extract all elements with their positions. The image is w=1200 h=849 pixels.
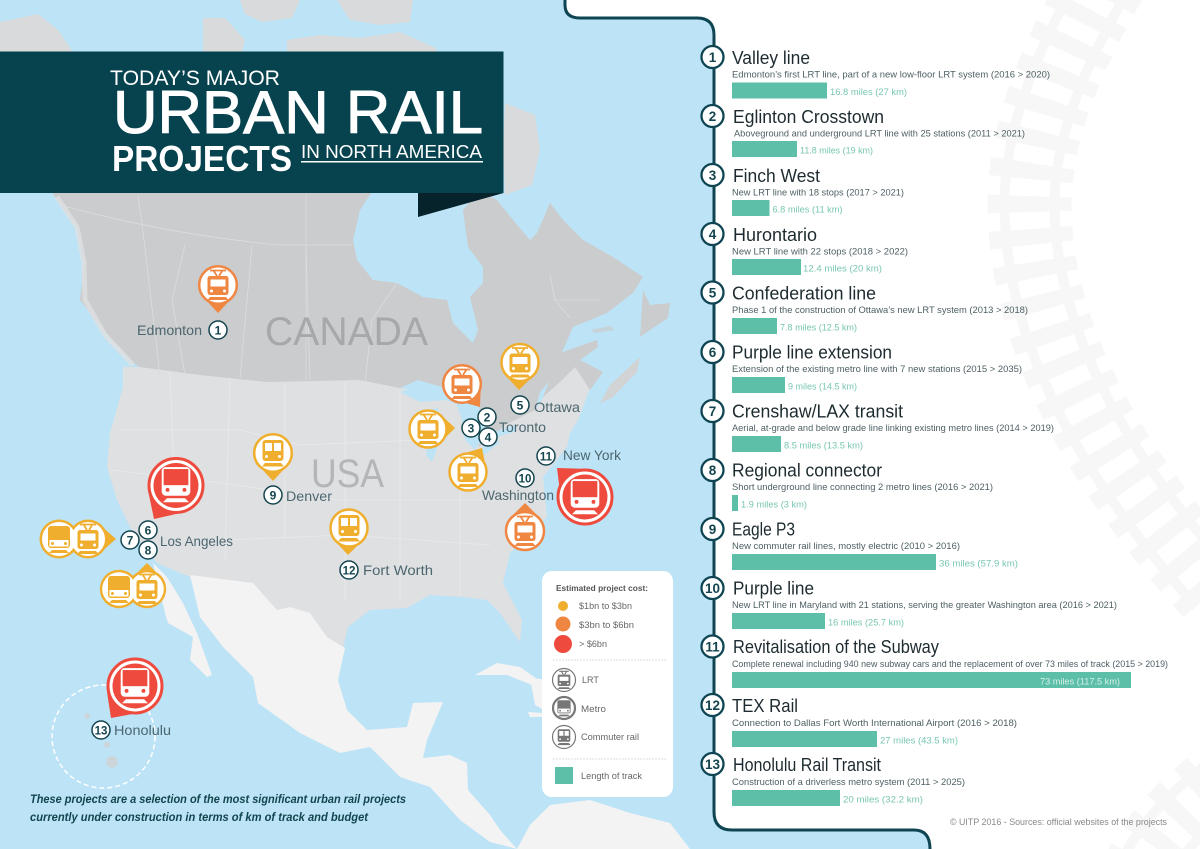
pin: Toronto LRT orange [443, 365, 481, 407]
project 10: Purple line: Purple line [733, 578, 814, 598]
city label: New York [537, 447, 622, 465]
city label: Washington: 10 [519, 474, 531, 486]
pin: Los Angeles metro red [149, 458, 203, 519]
project 10: Purple line [702, 577, 1117, 629]
project 7: Crenshaw/LAX transit [702, 400, 1054, 452]
project 9: Eagle P3: Eagle P3 [732, 520, 795, 540]
usa [107, 365, 590, 648]
project 1: Valley line: Valley line [732, 48, 810, 68]
city label: Los Angeles: Los Angeles [160, 533, 233, 549]
city label: Toronto [462, 408, 546, 446]
project 3: Finch West: 6.8 miles (11 km) [772, 204, 842, 216]
project 12: TEX Rail: TEX Rail [732, 696, 798, 716]
project 5: Confederation line: Confederation line [732, 284, 876, 304]
city label: Toronto: 4 [485, 430, 492, 444]
pin: Honolulu metro red [107, 659, 162, 718]
project 4: Hurontario: Hurontario [733, 225, 817, 245]
copyright and sources: © UITP 2016 - Sources: official websites of the projects [950, 817, 1167, 828]
city label: Edmonton [137, 321, 227, 339]
city label: Washington [482, 469, 554, 503]
project 7: Crenshaw/LAX transit: Aerial, at-grade and below grade line linking existing metro lines (2014 > 2019) [732, 423, 1054, 434]
city label: New York: New York [563, 447, 622, 463]
legend: rail types: Metro [581, 704, 606, 714]
project 2: Eglinton Crosstown [702, 105, 1025, 157]
project 4: Hurontario: New LRT line with 22 stops (2018 > 2022) [732, 246, 908, 258]
legend [542, 571, 673, 797]
pin: Toronto LRT yellow below [450, 448, 486, 490]
project 8: Regional connector [702, 459, 993, 511]
project 13: Honolulu Rail Transit: 13 [705, 757, 720, 772]
pin: Ottawa LRT [502, 344, 538, 390]
cuba and caribbean [475, 663, 690, 849]
city label: Toronto: 3 [468, 422, 475, 436]
project 7: Crenshaw/LAX transit: 8.5 miles (13.5 km) [784, 440, 863, 452]
project 1: Valley line [702, 46, 1050, 98]
project 10: Purple line: 16 miles (25.7 km) [828, 618, 904, 628]
project 13: Honolulu Rail Transit: Honolulu Rail Transit [733, 755, 881, 775]
legend: rail types [552, 668, 639, 748]
legend: cost scale: > $6bn [579, 639, 607, 649]
title banner: IN NORTH AMERICA [301, 142, 482, 162]
city label: Ottawa [511, 396, 580, 415]
project 11: Revitalisation of the Subway: 73 miles (117.5 km) [1040, 676, 1120, 688]
baja california [153, 563, 212, 677]
pin: Toronto LRT yellow left [410, 410, 455, 448]
project 6: Purple line extension: 9 miles (14.5 km) [788, 382, 857, 392]
city label: Los Angeles: 8 [145, 544, 152, 558]
project 4: Hurontario [702, 223, 908, 275]
background rail track [1030, 0, 1200, 849]
city label: Los Angeles: 6 [145, 524, 152, 538]
project 6: Purple line extension: Purple line extension [732, 342, 892, 362]
project 12: TEX Rail: 12 [705, 698, 720, 713]
project 12: TEX Rail: 27 miles (43.5 km) [880, 736, 958, 746]
project 2: Eglinton Crosstown: Aboveground and underground LRT line with 25 stations (2011 > 2021) [734, 128, 1025, 140]
city label: Fort Worth: Fort Worth [363, 562, 433, 578]
project 6: Purple line extension [702, 341, 1022, 393]
hawaii islands [84, 713, 118, 768]
project 2: Eglinton Crosstown: 11.8 miles (19 km) [800, 146, 873, 156]
legend heading: Estimated project cost: [556, 583, 648, 593]
project 5: Confederation line: 7.8 miles (12.5 km) [780, 322, 857, 334]
city label: Edmonton: 1 [215, 324, 222, 338]
rail line [565, 0, 930, 849]
project 4: Hurontario: 12.4 miles (20 km) [803, 264, 882, 274]
title banner: TODAY’S MAJOR [110, 67, 280, 90]
project 12: TEX Rail [702, 694, 1017, 747]
pin: Los Angeles double left [40, 520, 116, 558]
country label: Canada: CANADA [265, 310, 428, 354]
city label: Denver: Denver [286, 488, 332, 504]
city label: Toronto: Toronto [499, 419, 546, 435]
project 1: Valley line: Edmonton’s first LRT line, part of a new low-floor LRT system (2016 > 2020) [732, 70, 1050, 80]
great lakes [400, 385, 515, 462]
project 6: Purple line extension: 6 [709, 345, 717, 360]
project 12: TEX Rail: Connection to Dallas Fort Worth International Airport (2016 > 2018) [732, 718, 1017, 729]
project 9: Eagle P3: 9 [709, 522, 716, 537]
project 1: Valley line: 16.8 miles (27 km) [830, 87, 907, 98]
legend: length of track [555, 767, 643, 784]
city label: Washington: Washington [482, 487, 554, 503]
project 3: Finch West: New LRT line with 18 stops (2017 > 2021) [732, 188, 904, 198]
project 1: Valley line: 1 [709, 50, 717, 65]
city label: New York: 11 [540, 452, 553, 464]
project 11: Revitalisation of the Subway: Revitalisation of the Subway [733, 637, 939, 657]
pin: Denver commuter rail [254, 434, 292, 481]
legend: length of track: Length of track [581, 771, 643, 781]
project 5: Confederation line: 5 [709, 286, 717, 300]
project 5: Confederation line [702, 282, 1028, 334]
title banner [0, 52, 504, 217]
city label: Ottawa: 5 [517, 398, 524, 412]
city label: Los Angeles: 7 [127, 534, 134, 548]
project 9: Eagle P3: New commuter rail lines, mostly electric (2010 > 2016) [732, 541, 960, 552]
canada [50, 190, 643, 447]
right white panel with rail line [565, 0, 1200, 849]
legend: rail types: LRT [582, 675, 599, 685]
city label: Honolulu [92, 721, 171, 739]
project 9: Eagle P3: 36 miles (57.9 km) [939, 558, 1018, 570]
project 13: Honolulu Rail Transit: Construction of a driverless metro system (2011 > 2025) [732, 777, 965, 788]
project 10: Purple line: New LRT line in Maryland with 21 stations, serving the greater Washington area (2016 > 2021) [732, 600, 1117, 611]
project 2: Eglinton Crosstown: 2 [709, 109, 716, 124]
country label: USA: USA [311, 452, 384, 496]
project 11: Revitalisation of the Subway [702, 636, 1168, 688]
project 10: Purple line: 10 [705, 581, 720, 596]
city label: Honolulu: Honolulu [114, 722, 171, 738]
pin: New York metro red [557, 468, 612, 524]
footnote: currently under construction in terms of km of track and budget [30, 810, 369, 824]
city label: Honolulu: 13 [95, 726, 107, 738]
project 9: Eagle P3 [702, 518, 1018, 570]
project 11: Revitalisation of the Subway: 11 [705, 640, 720, 654]
coast, province and state lines [57, 197, 133, 365]
project 3: Finch West [702, 164, 904, 216]
project 8: Regional connector: Regional connector [732, 460, 882, 480]
project 3: Finch West: 3 [709, 168, 717, 183]
title banner: PROJECTS [112, 138, 292, 179]
pin: Los Angeles double lower [100, 563, 166, 608]
project 8: Regional connector: 1.9 miles (3 km) [741, 500, 807, 510]
project 13: Honolulu Rail Transit: 20 miles (32.2 km) [843, 794, 923, 806]
project 8: Regional connector: Short underground line connecting 2 metro lines (2016 > 2021) [732, 482, 993, 493]
project 2: Eglinton Crosstown: Eglinton Crosstown [733, 107, 884, 127]
city label: Edmonton: Edmonton [137, 322, 202, 338]
arctic islands and alaska [0, 0, 540, 195]
project 6: Purple line extension: Extension of the existing metro line with 7 new stations (2015 > 2035) [732, 364, 1022, 375]
project 11: Revitalisation of the Subway: Complete renewal including 940 new subway cars and the replacement of over 73 miles of track (2015 > 2019) [732, 659, 1168, 670]
project 7: Crenshaw/LAX transit: Crenshaw/LAX transit [732, 402, 903, 422]
mexico and central america [190, 575, 517, 849]
legend: rail types: Commuter rail [581, 732, 639, 742]
city label: Fort Worth: 12 [343, 566, 355, 578]
project 4: Hurontario: 4 [709, 227, 717, 242]
city label: Toronto: 2 [484, 410, 491, 424]
title banner: URBAN RAIL [113, 79, 483, 146]
city label: Denver: 9 [270, 488, 277, 502]
pin: Washington LRT [506, 503, 544, 550]
footnote: These projects are a selection of the most significant urban rail projects [30, 792, 406, 806]
project 5: Confederation line: Phase 1 of the construction of Ottawa’s new LRT system (2013 > 2018) [732, 305, 1028, 316]
pin: Fort Worth commuter rail [330, 510, 368, 555]
project 13: Honolulu Rail Transit [702, 753, 965, 806]
city label: Denver [264, 486, 332, 504]
pin: Edmonton LRT [199, 266, 237, 313]
legend: cost scale: $1bn to $3bn [579, 601, 632, 611]
hawaii inset dashed circle [52, 685, 155, 788]
city label: Fort Worth [340, 561, 433, 579]
project 3: Finch West: Finch West [733, 166, 820, 186]
city label: Los Angeles [121, 521, 233, 559]
city label: Ottawa: Ottawa [534, 399, 580, 415]
legend: cost scale [554, 601, 634, 653]
project 7: Crenshaw/LAX transit: 7 [709, 404, 716, 419]
legend: cost scale: $3bn to $6bn [579, 620, 634, 630]
project 8: Regional connector: 8 [709, 463, 717, 478]
footnote [30, 792, 406, 824]
